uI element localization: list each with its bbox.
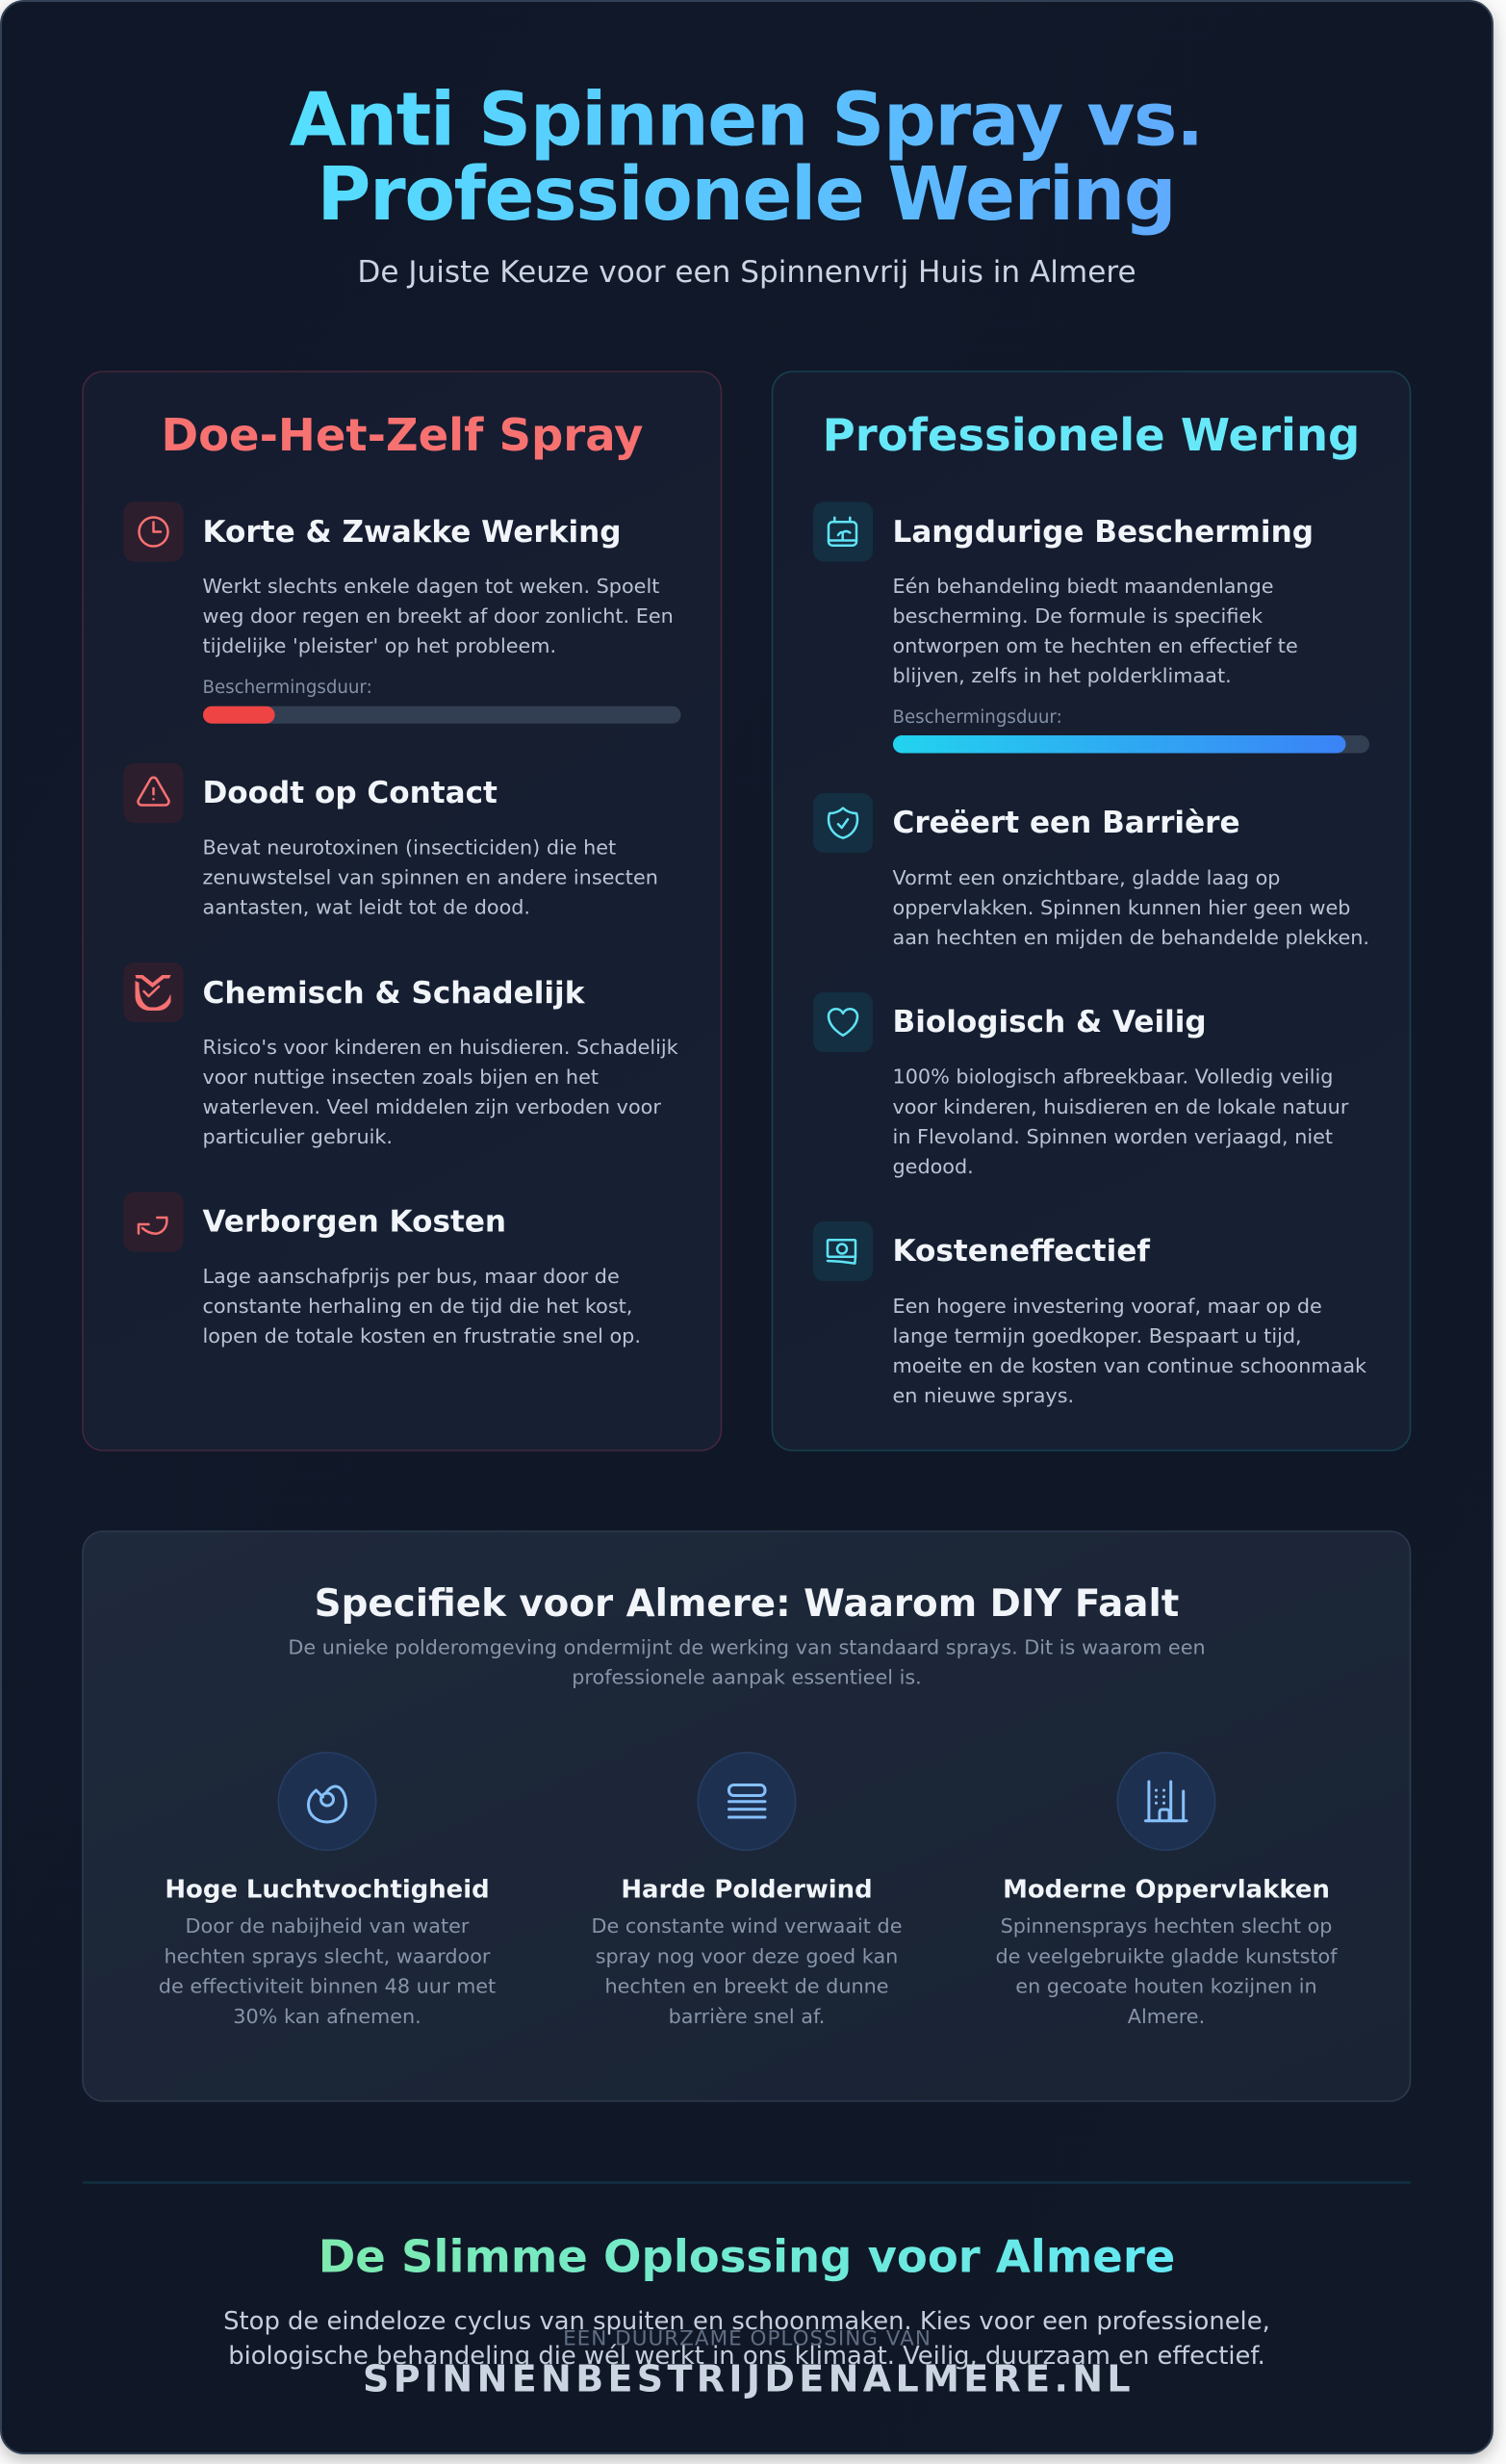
factor: Moderne Oppervlakken [995, 1753, 1338, 2028]
item: Kosteneffectief: lange termijn goedkoper. Bespaart u tijd, [893, 1324, 1302, 1348]
item: Creëert een Barrière: Creëert een Barrière [893, 806, 1240, 840]
icon: humidity swirl [277, 1752, 377, 1851]
footer conclusion [223, 2231, 1270, 2371]
item: Verborgen Kosten: Verborgen Kosten [202, 1205, 506, 1240]
title [290, 77, 1203, 238]
item: Verborgen Kosten: Lage aanschafprijs per bus, maar door de [202, 1265, 620, 1288]
item: Biologisch & Veilig: voor kinderen, huisdieren en de lokale natuur [893, 1095, 1349, 1118]
icon: building [1116, 1752, 1216, 1851]
item: Creëert een Barrière: aan hechten en mijden de behandelde plekken. [893, 926, 1369, 949]
item: Kosteneffectief: moeite en de kosten van continue schoonmaak [893, 1354, 1366, 1377]
item: Creëert een Barrière [813, 793, 1369, 949]
item: Kosteneffectief: Een hogere investering vooraf, maar op de [893, 1295, 1322, 1318]
factor: Harde Polderwind: hechten en breekt de dunne [604, 1975, 889, 1998]
item: Doodt op Contact: Bevat neurotoxinen (insecticiden) die het [202, 836, 616, 860]
panel heading: Doe-Het-Zelf Spray: Doe-Het-Zelf Spray [162, 409, 643, 461]
footer paragraph [223, 2307, 1270, 2371]
item: Langdurige Bescherming: Eén behandeling biedt maandenlange [893, 575, 1274, 598]
icon: return arrow [123, 1192, 183, 1251]
item: Doodt op Contact [123, 763, 658, 919]
footer heading: De Slimme Oplossing voor Almere [319, 2231, 1175, 2283]
footer paragraph: biologische behandeling die wél werkt in ons klimaat. Veilig, duurzaam en effectief. [228, 2342, 1265, 2371]
panel: Specifiek voor Almere [83, 1531, 1411, 2101]
header [290, 77, 1203, 290]
item: Kosteneffectief: en nieuwe sprays. [893, 1384, 1074, 1407]
item: Kosteneffectief: Kosteneffectief [893, 1234, 1150, 1269]
panel heading: Specifiek voor Almere: Waarom DIY Faalt [315, 1582, 1179, 1626]
icon: warning triangle [123, 763, 183, 823]
factor: Hoge Luchtvochtigheid: 30% kan afnemen. [233, 2005, 421, 2028]
item: Doodt op Contact: zenuwstelsel van spinnen en andere insecten [202, 866, 658, 889]
item: Kosteneffectief [813, 1221, 1366, 1407]
subtitle: De Juiste Keuze voor een Spinnenvrij Huis in Almere [357, 255, 1136, 290]
factor: Harde Polderwind: Harde Polderwind [621, 1875, 873, 1904]
item: Creëert een Barrière: Vormt een onzichtbare, gladde laag op [893, 866, 1280, 889]
item: Chemisch & Schadelijk [123, 962, 678, 1148]
panel intro text [288, 1635, 1206, 1689]
item: Langdurige Bescherming: Langdurige Bescherming [893, 515, 1314, 550]
item: Chemisch & Schadelijk: Risico's voor kinderen en huisdieren. Schadelijk [202, 1036, 678, 1059]
icon: shield check [813, 793, 873, 853]
item: Verborgen Kosten [123, 1192, 641, 1348]
panel intro text: professionele aanpak essentieel is. [572, 1666, 922, 1689]
bar: protection duration short: Beschermingsduur: [202, 678, 372, 698]
item: Langdurige Bescherming: ontworpen om te hechten en effectief te [893, 634, 1298, 657]
factor: Harde Polderwind: De constante wind verwaait de [592, 1914, 902, 1938]
factor: Moderne Oppervlakken: de veelgebruikte gladde kunststof [995, 1944, 1338, 1967]
icon: banknotes [813, 1221, 873, 1281]
bar: protection duration long: Beschermingsduur: [893, 707, 1062, 728]
panel intro text: De unieke polderomgeving ondermijnt de werking van standaard sprays. Dit is waarom een [288, 1635, 1206, 1658]
factor: Harde Polderwind: barrière snel af. [669, 2005, 825, 2028]
item: Biologisch & Veilig: Biologisch & Veilig [893, 1005, 1207, 1040]
factor: Moderne Oppervlakken: Almere. [1128, 2005, 1205, 2028]
brand credit: SPINNENBESTRIJDENALMERE.NL [363, 2358, 1135, 2400]
bar: protection duration long [893, 707, 1369, 753]
item: Korte & Zwakke Werking: Korte & Zwakke Werking [202, 515, 622, 550]
item: Chemisch & Schadelijk: Chemisch & Schadelijk [202, 976, 586, 1011]
item: Biologisch & Veilig [813, 992, 1349, 1178]
factor: Hoge Luchtvochtigheid: Hoge Luchtvochtigheid [165, 1875, 490, 1904]
item: Biologisch & Veilig: gedood. [893, 1155, 974, 1178]
item: Chemisch & Schadelijk: particulier gebruik. [202, 1125, 393, 1148]
icon: chemical check [123, 962, 183, 1022]
item: Creëert een Barrière: oppervlakken. Spinnen kunnen hier geen web [893, 896, 1350, 919]
panel: Doe-Het-Zelf Spray [83, 372, 722, 1450]
factor: Harde Polderwind [592, 1753, 902, 2028]
factor: Hoge Luchtvochtigheid [159, 1753, 496, 2028]
item: Doodt op Contact: aantasten, wat leidt tot de dood. [202, 896, 530, 919]
brand credit [363, 2327, 1135, 2400]
icon: clock [123, 502, 183, 562]
factor: Hoge Luchtvochtigheid: hechten sprays slecht, waardoor [165, 1944, 491, 1967]
brand credit: EEN DUURZAME OPLOSSING VAN [563, 2327, 932, 2351]
footer paragraph: Stop de eindeloze cyclus van spuiten en schoonmaken. Kies voor een professionele, [223, 2307, 1270, 2336]
factor: Moderne Oppervlakken: Moderne Oppervlakken [1003, 1875, 1330, 1904]
factor: Moderne Oppervlakken: Spinnensprays hechten slecht op [1001, 1914, 1332, 1938]
item: Korte & Zwakke Werking: Werkt slechts enkele dagen tot weken. Spoelt [202, 575, 659, 598]
factor: Moderne Oppervlakken: en gecoate houten kozijnen in [1015, 1975, 1317, 1998]
item: Verborgen Kosten: lopen de totale kosten en frustratie snel op. [202, 1324, 641, 1348]
title: Professionele Wering [317, 152, 1175, 238]
item: Biologisch & Veilig: in Flevoland. Spinnen worden verjaagd, niet [893, 1125, 1333, 1148]
item: Langdurige Bescherming: blijven, zelfs in het polderklimaat. [893, 664, 1232, 687]
item: Korte & Zwakke Werking: weg door regen en breekt af door zonlicht. Een [202, 604, 674, 628]
item: Langdurige Bescherming [813, 502, 1369, 753]
factor: Harde Polderwind: spray nog voor deze goed kan [596, 1944, 898, 1967]
factor: Hoge Luchtvochtigheid: de effectiviteit binnen 48 uur met [159, 1975, 496, 1998]
icon: wind lines [697, 1752, 797, 1851]
panel: Professionele Wering [772, 372, 1411, 1450]
bar: protection duration short [202, 678, 681, 724]
item: Korte & Zwakke Werking [123, 502, 681, 724]
icon: heart [813, 992, 873, 1052]
item: Chemisch & Schadelijk: voor nuttige insecten zoals bijen en het [202, 1065, 599, 1089]
panel heading: Professionele Wering: Professionele Wering [823, 409, 1360, 461]
item: Chemisch & Schadelijk: waterleven. Veel middelen zijn verboden voor [202, 1095, 661, 1118]
item: Verborgen Kosten: constante herhaling en de tijd die het kost, [202, 1295, 632, 1318]
item: Biologisch & Veilig: 100% biologisch afbreekbaar. Volledig veilig [893, 1065, 1333, 1089]
item: Doodt op Contact: Doodt op Contact [202, 776, 498, 810]
item: Langdurige Bescherming: bescherming. De formule is specifiek [893, 604, 1263, 628]
title: Anti Spinnen Spray vs. [290, 77, 1203, 164]
factor: Hoge Luchtvochtigheid: Door de nabijheid van water [186, 1914, 470, 1938]
icon: calendar with palm [813, 502, 873, 562]
item: Korte & Zwakke Werking: tijdelijke 'pleister' op het probleem. [202, 634, 556, 657]
